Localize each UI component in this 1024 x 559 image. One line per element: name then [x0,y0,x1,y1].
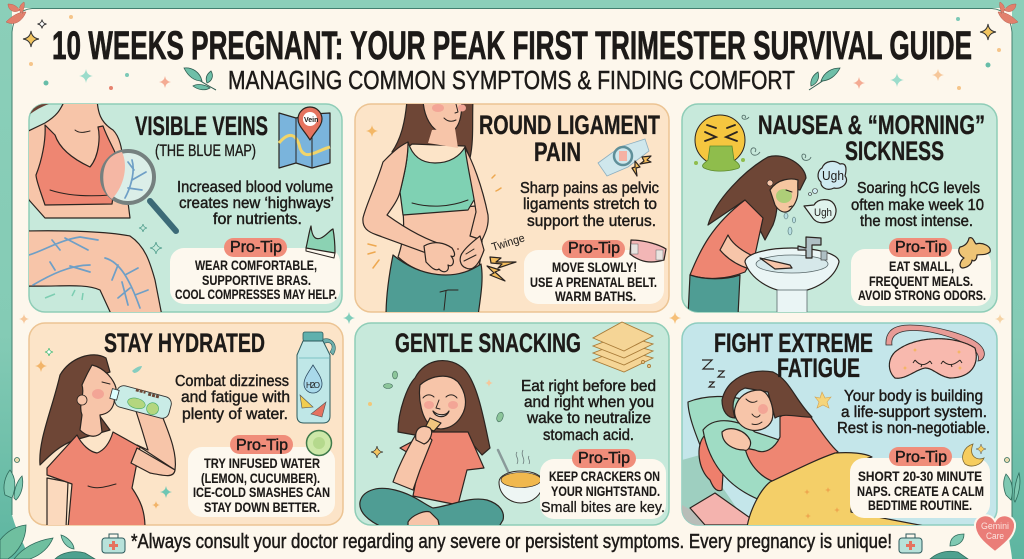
heading: stay hydrated: STAY HYDRATED [104,328,265,358]
icon: first aid kit right [899,534,922,553]
icon: sick emoji [694,115,811,171]
disclaimer footer: *Always consult your doctor regarding any severe or persistent symptoms. Every pregnancy is unique! [131,531,892,553]
heading: nausea [758,110,985,166]
subheading: (THE BLUE MAP) [155,141,256,160]
heading: fight extreme fatigue: FIGHT EXTREME [714,328,873,358]
illustration: woman sleeping [682,371,935,530]
body text: Sharp pains as pelvic [520,180,659,197]
icon: prenatal belt [630,240,666,262]
tip text: TRY INFUSED WATER [204,456,320,471]
logo: gemini care heart: Gemini [981,521,1009,531]
left corner foliage [0,458,95,559]
decorative sparkles [139,224,162,254]
tip text [858,259,986,303]
tip text: COOL COMPRESSES MAY HELP. [175,287,337,302]
heading: nausea: SICKNESS [845,136,944,166]
body text: stomach acid. [543,427,634,444]
heading: round ligament pain: ROUND LIGAMENT [479,110,660,140]
body text: creates new ‘highways’ [179,195,334,212]
tip box [850,458,990,518]
icon: cucumber slice [306,430,332,456]
pro-tip badge: Pro-Tip [230,239,282,256]
tip text: Small bites are key. [541,500,665,516]
tip text: NAPS. CREATE A CALM [857,484,984,499]
heading: gentle snacking: GENTLE SNACKING [395,328,581,358]
tip text: BEDTIME ROUTINE. [868,498,972,513]
pro-tip badge: Pro-Tip [578,450,630,467]
body text: Combat dizziness [175,373,289,390]
body text: wake to neutralize [526,410,651,427]
logo: gemini care heart: Care [986,531,1004,541]
icon: folded map with pin: Vein [304,117,318,124]
icon: sleep mask [886,325,984,378]
body text [837,388,990,437]
speech bubble: ugh large [808,161,847,196]
speech bubble: ugh small [804,200,836,223]
icon: sleep z's [702,360,725,387]
tip box [170,248,340,304]
panel: gentle snacking [355,322,669,530]
tip text: MOVE SLOWLY! [552,260,637,275]
right corner foliage [930,458,1020,559]
tip text: USE A PRENATAL BELT. [530,275,657,290]
panel: visible veins [15,100,342,316]
icon: moon and star [963,444,986,466]
tip text: WEAR COMFORTABLE, [195,258,317,273]
panel: stay hydrated [29,323,343,528]
tip text: EAT SMALL, [889,259,954,274]
tip text: ICE-COLD SMASHES CAN [193,485,330,500]
panel: fight extreme fatigue [682,323,997,530]
speech bubble: ugh small: Ugh [814,207,832,219]
icon: ginger [959,238,990,268]
icon: bottle at lips [108,383,173,420]
icon: first aid kit left [102,534,125,553]
body text [175,373,290,423]
icon: left leaf branch [184,68,216,90]
tip text: (LEMON, CUCUMBER). [201,471,320,486]
decorative star [815,392,831,408]
tip box [851,249,991,306]
speech bubble: ugh large: Ugh [822,168,844,183]
illustration: woman eating a cracker [360,361,503,530]
logo: gemini care heart [975,515,1015,552]
body text [520,180,659,230]
tip text [175,258,337,302]
label: twinge: Twinge [490,232,526,254]
pro-tip badge: Pro-Tip [568,240,620,257]
tip text: SUPPORTIVE BRAS. [202,273,311,288]
sparkles and dots [19,15,1005,324]
icon: water bottle: H2O [306,381,320,390]
heading: visible veins: VISIBLE VEINS [135,111,268,141]
body text: the most intense. [860,213,973,230]
body text: Increased blood volume [177,179,333,196]
body text: for nutrients. [213,211,302,228]
tip box [524,250,664,304]
icon: magnifying glass [102,151,176,231]
body text: and fatigue with [181,389,290,406]
tip text: FREQUENT MEALS. [869,274,973,289]
body text: plenty of water. [182,406,288,423]
icon: stack of crackers [593,322,653,372]
body text: often make week 10 [851,197,984,214]
pro-tip badge: Pro-Tip [895,239,947,256]
tip text: KEEP CRACKERS ON [549,469,660,484]
illustration: torso, bra and veined leg [29,104,162,312]
tip text [857,469,984,513]
body text [521,378,656,444]
illustration: woman drinking water [40,355,175,528]
body text: a life-support system. [841,404,987,421]
tip box [540,459,666,519]
body text: Soaring hCG levels [857,180,980,197]
icon: soup bowl [498,450,543,503]
illustration: woman over sink [688,156,839,320]
body text: support the uterus. [527,213,656,230]
body text: Eat right before bed [521,378,656,395]
panel: nausea and morning sickness [682,104,997,320]
tip text: YOUR NIGHTSTAND. [551,484,660,499]
tip text [193,456,330,515]
icon: stretched ligament [598,139,651,176]
heading: round ligament pain [479,110,660,167]
icon: right leaf branch [809,68,840,90]
icon: twinge bolts [487,257,516,281]
heading: fight extreme fatigue: FATIGUE [777,353,860,383]
tip box [188,447,335,517]
tip text: AVOID STRONG ODORS. [858,288,986,303]
tip text: STAY DOWN BETTER. [204,500,320,515]
body text [177,179,334,228]
pro-tip badge: Pro-Tip [236,437,288,454]
tip text [541,469,665,516]
icon: water bottle [297,332,335,423]
tip text [530,260,657,304]
icon: folded map with pin [279,107,330,168]
body text: ligaments stretch to [523,196,657,213]
panel: round ligament pain [355,100,669,316]
body text: and right when you [524,394,654,411]
decorative sparkles [35,348,172,509]
icon: sports bra [306,226,335,258]
body text [851,180,984,230]
illustration: woman holding belly [363,100,501,316]
decorative leaves and sparkles [368,371,505,458]
subtitle: MANAGING COMMON SYMPTOMS & FINDING COMFORT [228,65,795,95]
tip text: WARM BATHS. [555,289,636,304]
pro-tip badge: Pro-Tip [895,449,947,466]
heading: round ligament pain: PAIN [534,137,581,167]
body text: Your body is building [844,388,983,405]
body text: Rest is non-negotiable. [837,420,990,437]
tip text: SHORT 20-30 MINUTE [858,469,982,484]
icon: drops [784,213,796,235]
heading: fight extreme fatigue [714,328,873,383]
